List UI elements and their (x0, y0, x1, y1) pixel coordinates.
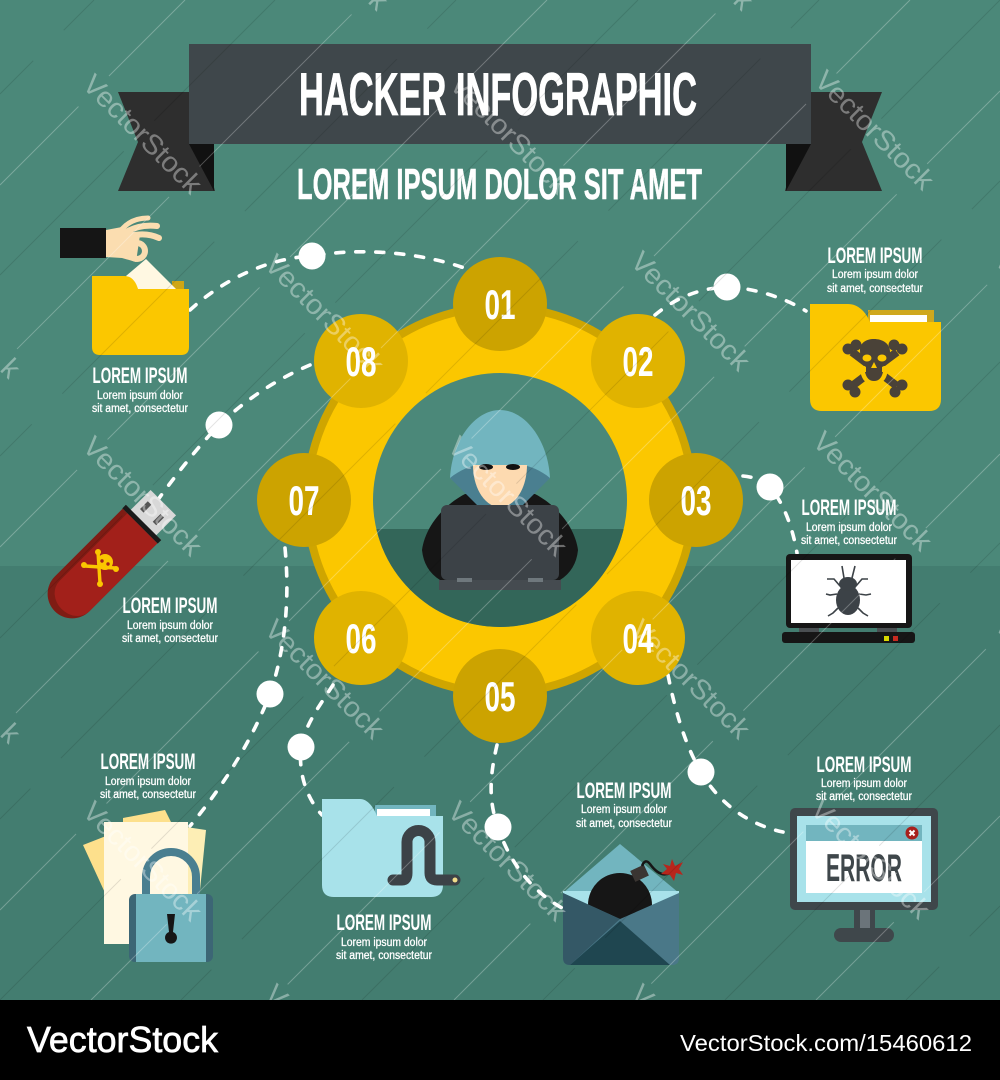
numbered circles (257, 257, 743, 743)
icon: hand and yellow folder (60, 218, 189, 355)
watermark text: VectorStock (442, 430, 574, 563)
label: error: sit amet, consectetur (816, 791, 912, 803)
watermark text: VectorStock (77, 430, 209, 563)
label: papers (100, 749, 196, 801)
central hacker figure (370, 410, 630, 629)
label: laptop: Lorem ipsum dolor (806, 522, 892, 534)
title: HACKER INFOGRAPHIC (299, 61, 697, 128)
watermark text: VectorStock (442, 795, 574, 928)
label: top right: sit amet, consectetur (827, 283, 923, 295)
icon: laptop with bug (782, 554, 915, 643)
watermark text: VectorStock (809, 64, 941, 197)
label: envelope (576, 778, 672, 830)
numbered circles: 06 (346, 615, 376, 662)
label: papers: sit amet, consectetur (100, 789, 196, 801)
numbered circles: 03 (680, 477, 712, 524)
icon: infected USB stick (37, 485, 181, 629)
label: top left: Lorem ipsum dolor (97, 390, 183, 402)
label: blue folder: LOREM IPSUM (336, 910, 432, 935)
numbered circles: 02 (622, 338, 654, 385)
numbered circles: 08 (346, 338, 376, 385)
label: top left: sit amet, consectetur (92, 403, 188, 415)
label: USB: Lorem ipsum dolor (127, 620, 213, 632)
dashed connectors (152, 252, 806, 908)
label: top left (92, 363, 188, 415)
label: envelope: LOREM IPSUM (576, 778, 672, 803)
label: top left: LOREM IPSUM (92, 363, 188, 388)
connector nodes (206, 242, 784, 840)
label: USB: sit amet, consectetur (122, 633, 218, 645)
watermark text: VectorStock (625, 245, 757, 378)
watermark text: VectorStock (259, 613, 391, 746)
icon: error monitor (790, 808, 938, 942)
footer bar (0, 1000, 1000, 1080)
numbered circles: 04 (622, 615, 654, 662)
label: papers: LOREM IPSUM (100, 749, 196, 774)
icon: blue folder with worm (322, 799, 458, 897)
watermark text: V (625, 978, 660, 1014)
numbered circles: 07 (288, 477, 320, 524)
label: laptop: LOREM IPSUM (802, 495, 896, 520)
watermark text: VectorStock (259, 248, 391, 381)
watermark text: VectorStock (77, 795, 209, 928)
label: USB (122, 593, 218, 645)
label: error (816, 752, 912, 803)
subtitle: LOREM IPSUM DOLOR SIT AMET (297, 160, 702, 209)
label: top right (827, 243, 923, 295)
label: envelope: sit amet, consectetur (576, 818, 672, 830)
label: blue folder (336, 910, 432, 962)
footer bar: VectorStock.com/15460612 (680, 1030, 972, 1056)
numbered circles: 05 (484, 673, 516, 720)
watermark text: VectorStock (77, 68, 209, 201)
watermark text: VectorStock (625, 613, 757, 746)
label: blue folder: sit amet, consectetur (336, 950, 432, 962)
footer bar: VectorStock (27, 1019, 219, 1060)
label: top right: Lorem ipsum dolor (832, 269, 918, 281)
label: error: LOREM IPSUM (816, 752, 912, 777)
numbered circles: 01 (484, 281, 516, 328)
banner ribbon (118, 44, 882, 191)
label: papers: Lorem ipsum dolor (105, 776, 191, 788)
label: top right: LOREM IPSUM (828, 243, 922, 268)
watermark text: VectorStock (807, 425, 939, 558)
icon: envelope with bomb (563, 844, 683, 965)
label: error: Lorem ipsum dolor (821, 778, 907, 790)
label: laptop: sit amet, consectetur (801, 535, 897, 547)
watermark text: VectorStock (805, 793, 937, 926)
label: laptop (801, 495, 897, 547)
icon: skull folder (810, 304, 941, 411)
central gear ring (303, 303, 697, 697)
icon: papers and padlock (83, 810, 213, 962)
icon: error monitor: ERROR (826, 847, 902, 890)
watermark text: V (259, 978, 294, 1014)
watermark text: VectorStock (444, 68, 576, 201)
label: envelope: Lorem ipsum dolor (581, 804, 667, 816)
label: USB: LOREM IPSUM (122, 593, 218, 618)
label: blue folder: Lorem ipsum dolor (341, 937, 427, 949)
